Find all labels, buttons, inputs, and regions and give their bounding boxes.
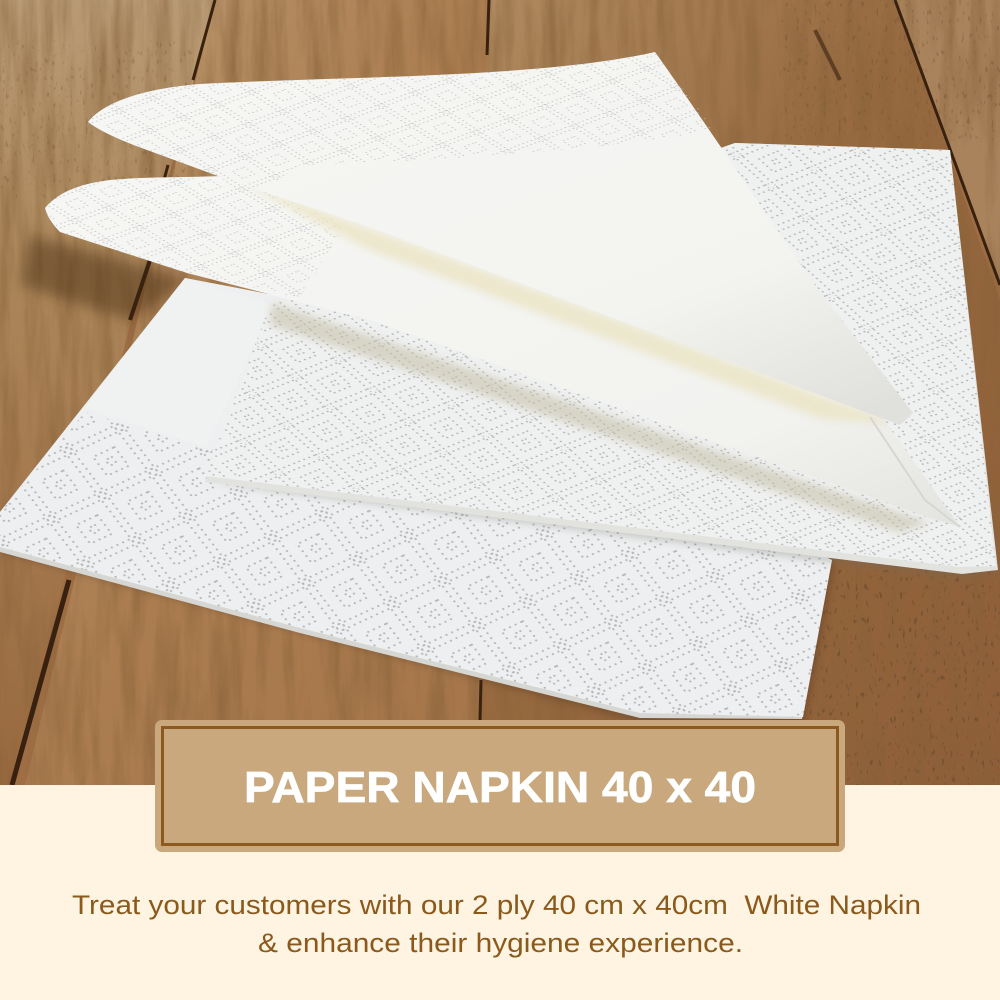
title text: PAPER NAPKIN 40 x 40 <box>244 763 756 812</box>
emboss band on middle fold <box>45 178 345 298</box>
plank: centre right <box>480 0 1000 785</box>
wood grain <box>0 0 1000 785</box>
napkin: top fold <box>88 52 913 425</box>
plank: far left <box>0 0 214 510</box>
emboss pattern on bottom sheet <box>0 412 832 717</box>
emboss band on top fold <box>88 52 715 191</box>
title banner <box>155 720 845 852</box>
description text <box>72 890 921 958</box>
description text: Treat your customers with our 2 ply 40 cm x 40cm White Napkin <box>72 890 921 920</box>
napkin: right back sheet <box>205 143 998 577</box>
folded flap edge <box>870 417 960 527</box>
napkin: bottom unfolded sheet <box>0 278 835 724</box>
emboss pattern on back sheet <box>205 143 996 567</box>
plank seams <box>12 0 1000 785</box>
plank: centre left <box>25 0 490 785</box>
plank: far right <box>895 0 1000 285</box>
description text: & enhance their hygiene experience. <box>258 928 743 958</box>
cream crease under top fold <box>237 180 900 425</box>
shadow beneath fold tips <box>20 235 190 320</box>
napkin: middle fold <box>45 175 960 527</box>
smooth border of bottom sheet <box>85 278 272 448</box>
wood speckles <box>0 0 1000 785</box>
wood table background <box>0 0 1000 785</box>
shadow cast by middle fold <box>270 303 930 532</box>
